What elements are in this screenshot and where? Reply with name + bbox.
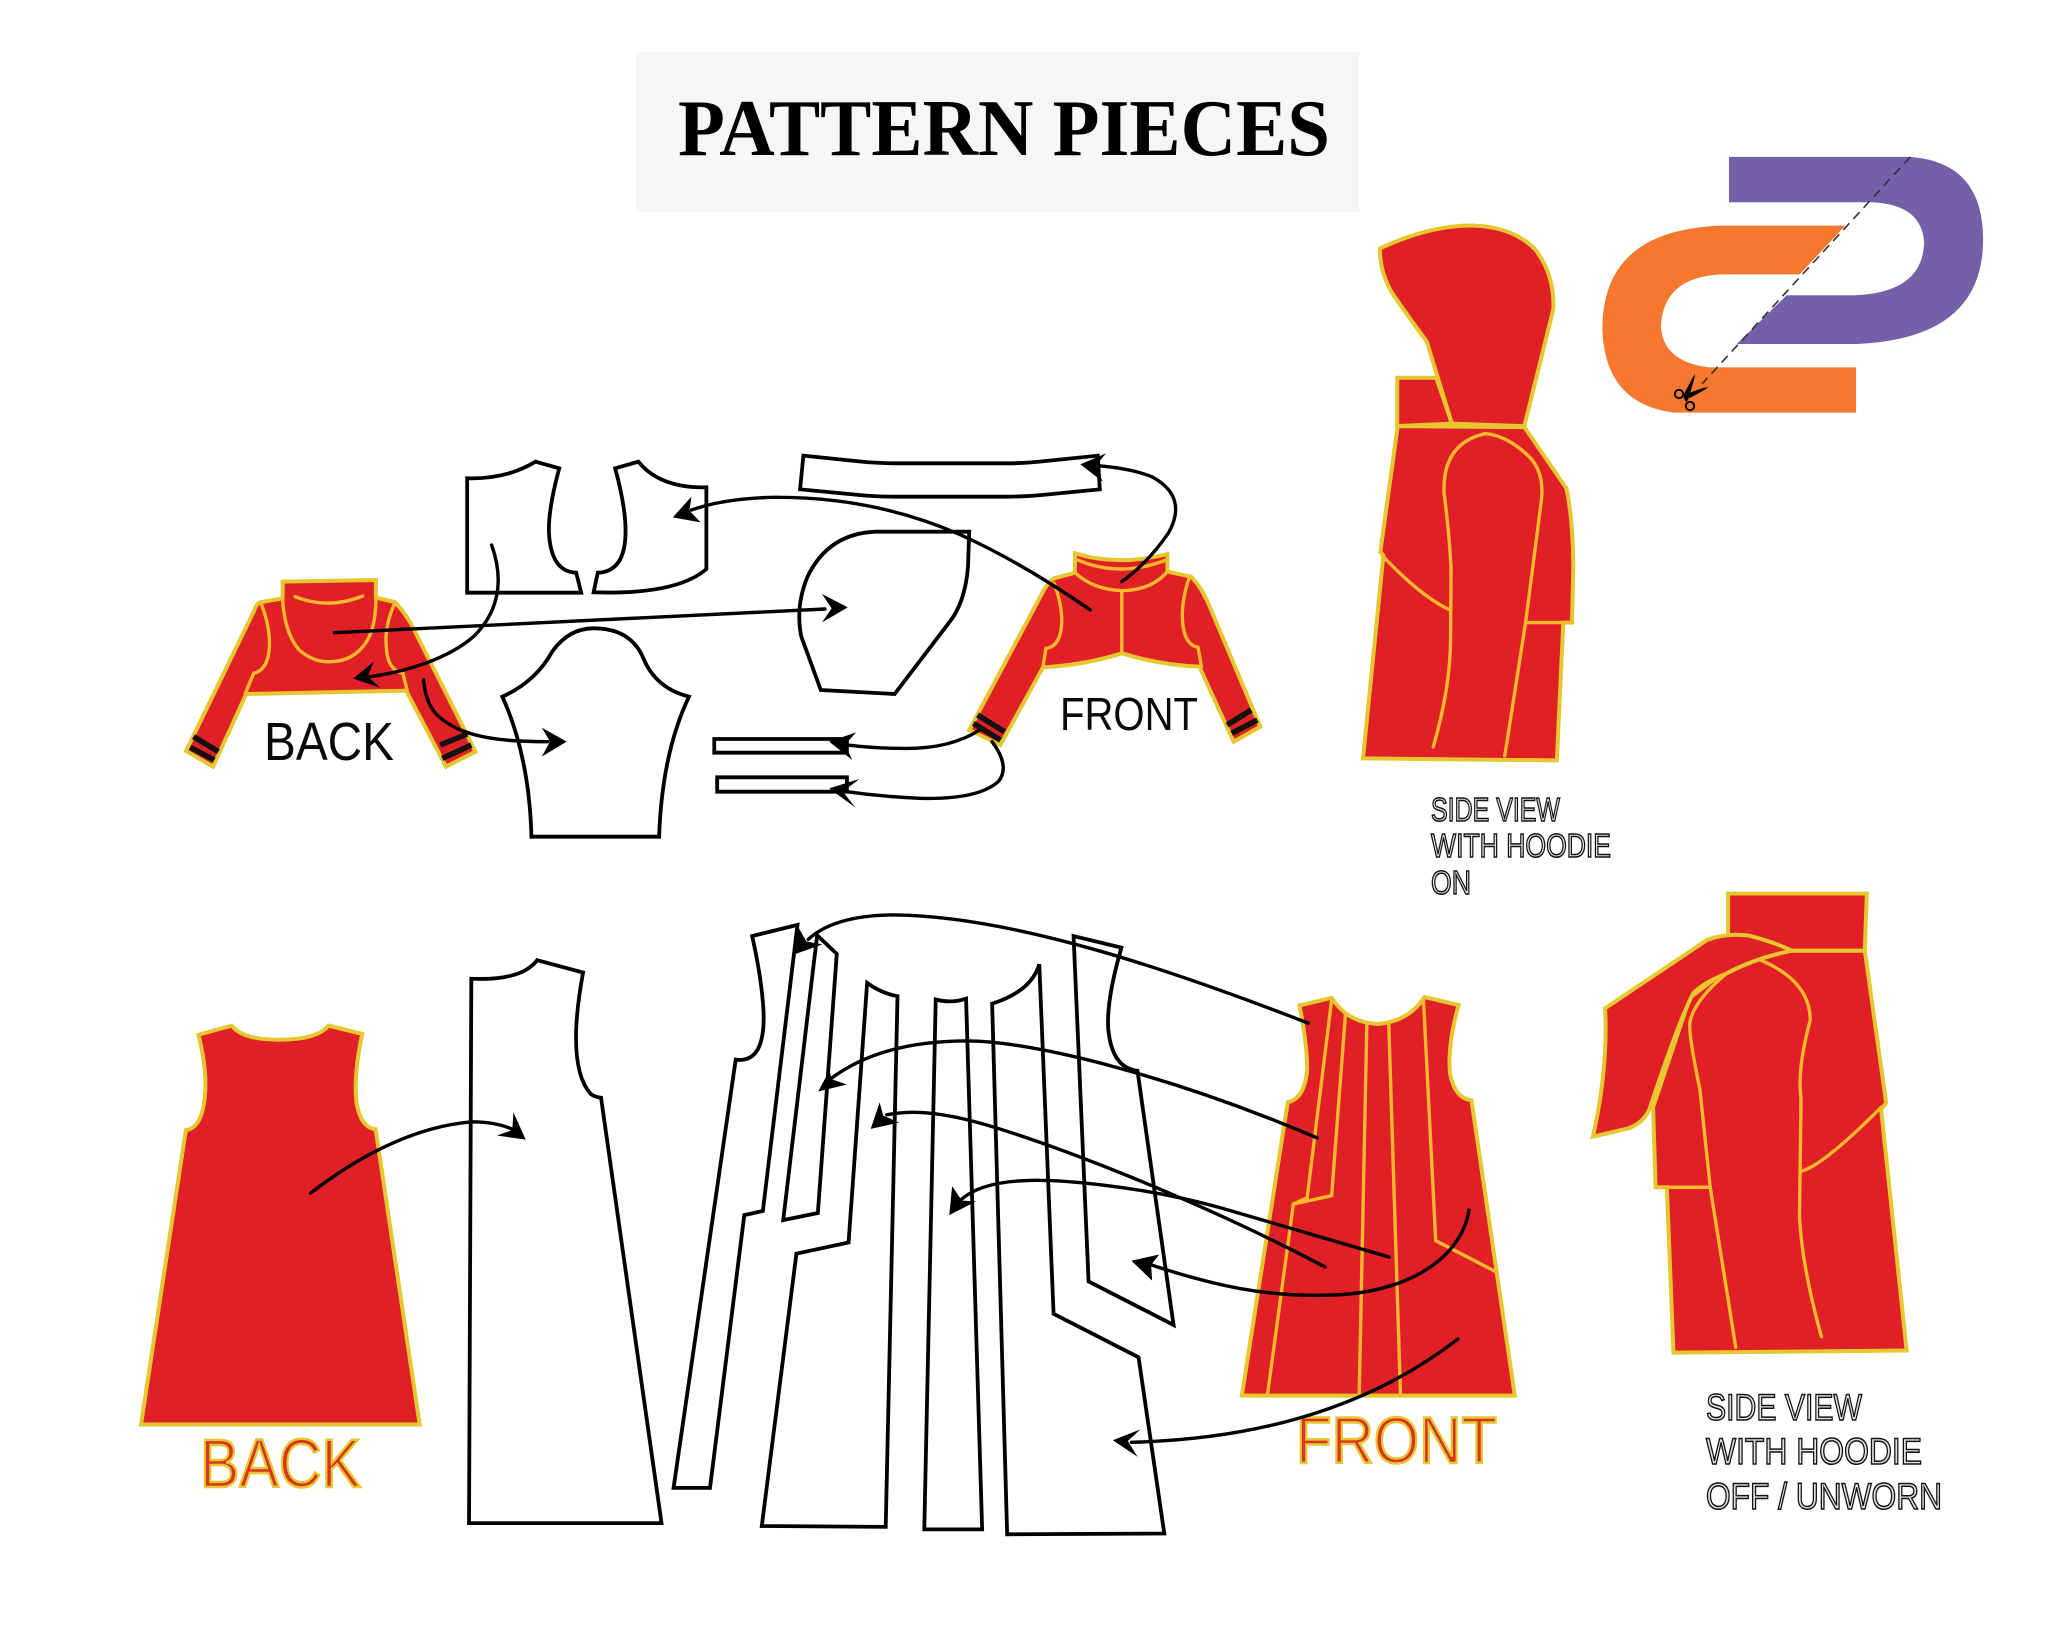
panel 5 <box>992 964 1164 1534</box>
icon: scissors <box>1675 374 1708 410</box>
caption: side view hoodie off: SIDE VIEW <box>1706 1387 1862 1428</box>
caption: side view hoodie on: WITH HOODIE <box>1431 827 1611 864</box>
arrows: upper set, right <box>673 453 1176 807</box>
cuff strip 1 <box>714 739 847 753</box>
arrow: back to hood piece <box>334 594 848 633</box>
label: back: BACK <box>264 712 394 772</box>
panel 3 <box>762 983 897 1527</box>
caption: side view hoodie off <box>1706 1387 1942 1517</box>
logo orange half <box>1602 226 1856 413</box>
pattern pieces: dress front panels <box>674 925 1174 1534</box>
side view: hoodie off <box>1593 893 1907 1353</box>
title: PATTERN PIECES <box>678 85 1330 173</box>
panel 4 <box>924 999 982 1529</box>
label: back gold: BACK <box>200 1425 361 1502</box>
label: front gold: FRONT <box>1296 1403 1497 1477</box>
caption: side view hoodie off: WITH HOODIE <box>1706 1431 1922 1472</box>
caption: side view hoodie on: SIDE VIEW <box>1431 791 1561 828</box>
arrows: upper set, left <box>353 545 567 757</box>
arrow: dress back to pattern <box>311 1112 526 1193</box>
logo purple half <box>1729 157 1983 344</box>
pattern pieces: upper set <box>467 456 1100 837</box>
collar strip <box>800 456 1100 497</box>
back bodice piece right <box>594 462 706 593</box>
caption: side view hoodie on: ON <box>1431 864 1471 901</box>
panel 1 <box>674 925 797 1488</box>
caption: side view hoodie off: OFF / UNWORN <box>1706 1476 1942 1517</box>
panel 6 <box>1074 936 1174 1325</box>
dress back view <box>141 1026 420 1424</box>
logo: orange and purple S with scissors <box>1602 157 1983 413</box>
hood piece <box>799 532 969 694</box>
label: front: FRONT <box>1060 688 1198 740</box>
side view: hoodie on <box>1363 226 1573 760</box>
caption: side view hoodie on <box>1431 791 1611 901</box>
panel 2 <box>783 935 837 1220</box>
pattern piece: dress back <box>469 960 662 1523</box>
sleeve piece <box>502 628 689 837</box>
jacket front view <box>969 553 1260 745</box>
dress front view <box>1242 997 1515 1396</box>
arrows: dress front to panels <box>796 915 1469 1457</box>
cut line <box>1702 157 1910 384</box>
back bodice piece left <box>467 462 581 593</box>
title <box>636 52 1359 212</box>
cuff strip 2 <box>717 777 847 792</box>
jacket back view <box>186 580 475 767</box>
